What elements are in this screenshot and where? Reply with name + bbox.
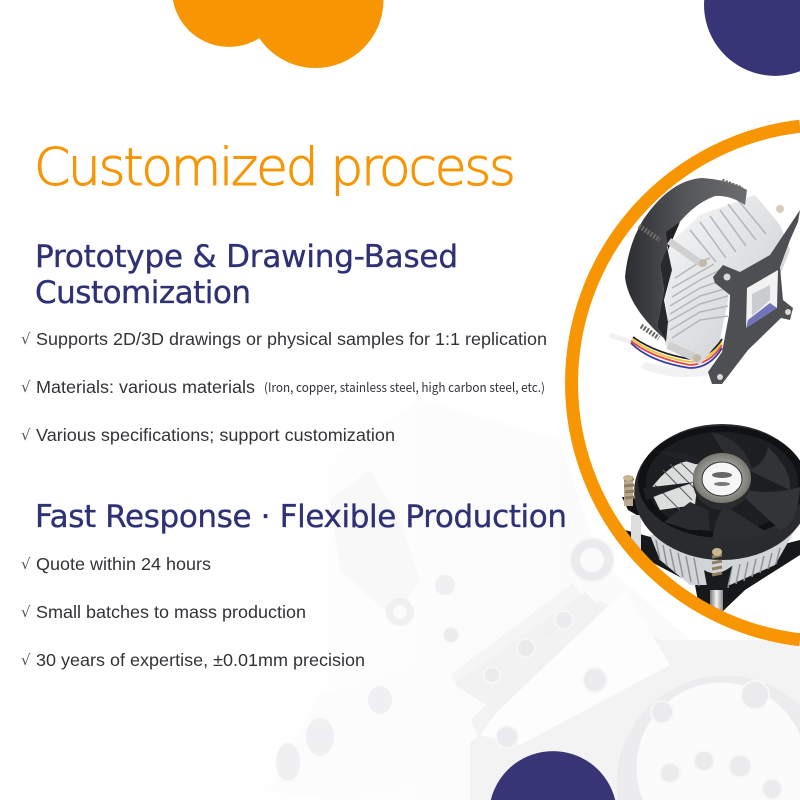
decorative navy circle, top right bbox=[704, 0, 800, 76]
shroud bbox=[625, 178, 747, 340]
heading: prototype and drawing-based customization: Customization bbox=[35, 275, 251, 311]
item: materials bbox=[21, 377, 545, 397]
heading: prototype and drawing-based customization: Prototype & Drawing-Based bbox=[35, 239, 458, 275]
heat pipes and pins bbox=[668, 241, 703, 360]
bracket bbox=[708, 210, 800, 384]
fins bbox=[665, 195, 790, 365]
item: batches: √ bbox=[21, 603, 31, 621]
base arms bbox=[625, 530, 800, 612]
item: specifications: √ bbox=[21, 426, 31, 444]
fin glimpse bbox=[650, 461, 700, 510]
product photo circle with orange ring bbox=[572, 126, 800, 640]
feature list: response bbox=[21, 554, 365, 670]
item: materials: (Iron, copper, stainless steel, high carbon steel, etc.) bbox=[264, 377, 545, 396]
side screw post bbox=[622, 497, 640, 515]
fins bbox=[650, 530, 795, 585]
item: materials: √ bbox=[21, 378, 31, 396]
hub label bbox=[702, 462, 742, 496]
decorative orange circles bbox=[173, 0, 384, 68]
blades bbox=[643, 432, 800, 541]
title: Customized process bbox=[34, 138, 516, 198]
heading: prototype and drawing-based customization bbox=[35, 239, 458, 311]
white circle with orange ring bbox=[572, 126, 800, 640]
feature list: customization bbox=[21, 329, 547, 445]
decorative navy circle, bottom bbox=[491, 751, 615, 800]
background: faint machinery photo bbox=[170, 400, 800, 800]
product: cooler rear view bbox=[610, 178, 800, 384]
product: cooler front view bbox=[622, 424, 800, 615]
heading: fast response: Fast Response · Flexible Production bbox=[35, 499, 567, 535]
item: quote: √ bbox=[21, 555, 31, 573]
front screw bbox=[704, 566, 732, 585]
item: drawings: √ bbox=[21, 330, 31, 348]
hub bbox=[693, 478, 751, 510]
item: quote: Quote within 24 hours bbox=[36, 554, 211, 574]
item: specifications: Various specifications; support customization bbox=[36, 425, 395, 445]
item: drawings: Supports 2D/3D drawings or physical samples for 1:1 replication bbox=[36, 329, 547, 349]
gear rings bbox=[617, 675, 800, 800]
bolts bbox=[443, 538, 782, 799]
fan frame bbox=[634, 424, 800, 560]
item: batches: Small batches to mass production bbox=[36, 602, 306, 622]
item: expertise: 30 years of expertise, ±0.01mm precision bbox=[36, 650, 365, 670]
item: expertise: √ bbox=[21, 651, 31, 669]
item: materials: Materials: various materials bbox=[36, 377, 255, 397]
rear screw bbox=[624, 479, 635, 498]
white plates bbox=[447, 583, 585, 690]
